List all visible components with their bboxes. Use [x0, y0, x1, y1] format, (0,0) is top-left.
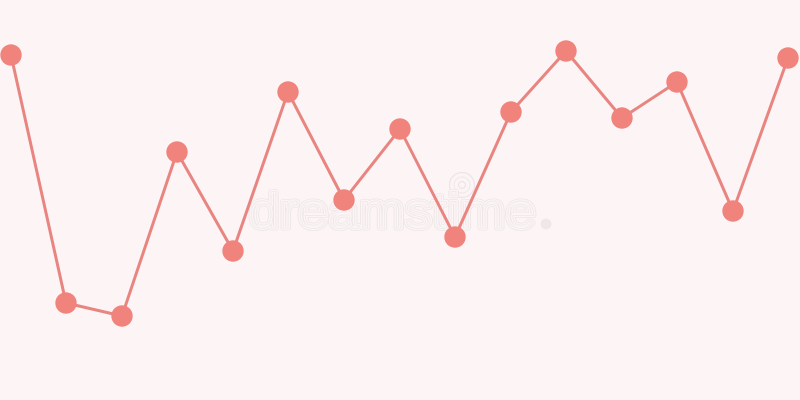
watermark: dreamstime: [249, 183, 536, 239]
data points: [0, 40, 799, 327]
watermark: dreamstime: [249, 183, 536, 239]
watermark: dreamstime: [249, 183, 536, 239]
data line: [11, 51, 788, 316]
